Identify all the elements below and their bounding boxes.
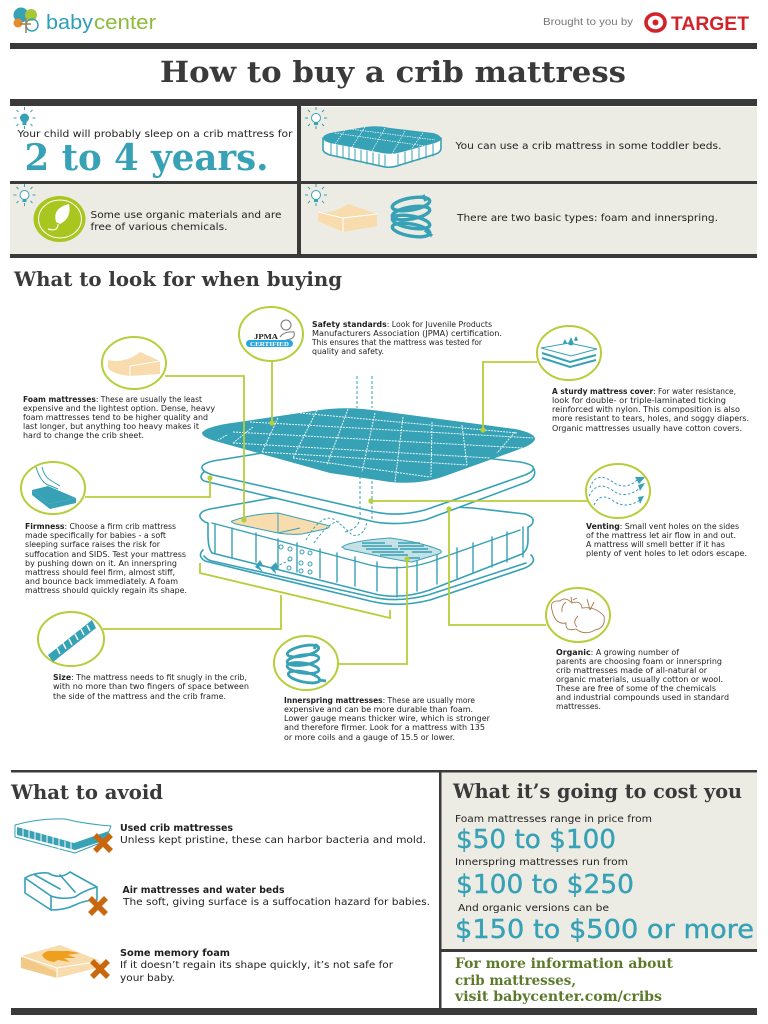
text: free of various chemicals. — [90, 222, 228, 233]
more information link text: crib mattresses, — [455, 973, 576, 989]
text — [552, 387, 749, 433]
title: How to buy a crib mattress — [160, 55, 626, 89]
text: Used crib mattresses — [120, 823, 233, 834]
text: of the mattress let air flow in and out. — [586, 531, 736, 540]
text: If it doesn’t regain its shape quickly, it’s not safe for — [120, 960, 394, 971]
quilted sheet — [202, 408, 535, 483]
text — [555, 648, 729, 711]
text: A sturdy mattress cover: For water resistance, — [552, 387, 736, 396]
icon: wavy mattress — [25, 872, 97, 910]
icon: spring — [391, 195, 432, 239]
text: suffocation and SIDS. Test your mattress — [25, 550, 186, 559]
text — [25, 522, 187, 595]
callout: organic — [446, 506, 729, 711]
text: or more coils and a gauge of 15.5 or lower. — [284, 733, 455, 742]
text: by pushing down on it. An innerspring — [25, 559, 177, 568]
more information link text: For more information about — [455, 956, 674, 972]
text: A mattress will smell better if it has — [586, 540, 725, 549]
text: mattress should quickly regain its shape. — [25, 586, 187, 595]
sponsor: brought to you by Target: TARGET — [671, 13, 749, 35]
text — [120, 823, 426, 846]
lower box — [200, 490, 533, 604]
heading: What to avoid — [10, 781, 163, 804]
text: The soft, giving surface is a suffocation hazard for babies. — [122, 897, 430, 908]
text — [122, 885, 430, 908]
icon: mattress — [323, 126, 441, 167]
price: innerspring: $100 to $250 — [456, 870, 634, 900]
text: Innerspring mattresses: These are usually more — [284, 696, 475, 705]
icon: layers and drops — [541, 336, 597, 367]
sponsor: brought to you by Target: Brought to you by — [543, 16, 634, 28]
text: Organic mattresses usually have cotton covers. — [552, 424, 742, 433]
icon: orange x — [92, 961, 108, 977]
callout: firmness — [21, 462, 213, 595]
logo: babycenter: baby — [46, 12, 93, 34]
panel: two basic types — [301, 184, 757, 254]
vent dashed lines — [345, 376, 372, 532]
text: Safety standards: Look for Juvenile Products — [312, 320, 492, 329]
text: You can use a crib mattress in some toddler beds. — [454, 141, 722, 152]
text: organic materials, usually cotton or wool. — [556, 675, 723, 684]
more information link text: visit babycenter.com/cribs — [454, 989, 662, 1005]
price: organic: $150 to $500 or more — [455, 915, 754, 945]
text — [120, 948, 394, 984]
price: organic — [455, 903, 754, 945]
text: and industrial compounds used in standard — [556, 693, 729, 702]
text: Foam mattresses: These are usually the least — [23, 395, 202, 404]
price: innerspring — [455, 857, 634, 900]
item: memory foam — [21, 945, 394, 984]
icon: bulb — [305, 107, 327, 129]
icon: bulb — [305, 184, 327, 206]
panel: what to avoid — [10, 781, 430, 984]
item: used crib mattresses — [15, 819, 426, 853]
icon: hand on mattress — [32, 467, 76, 509]
panel: toddler beds — [301, 107, 757, 181]
callout: venting — [368, 464, 747, 558]
text — [23, 395, 215, 440]
foam window — [232, 513, 329, 534]
text — [311, 320, 502, 356]
text — [586, 522, 747, 558]
vents — [275, 490, 368, 574]
icon: foam block — [318, 204, 377, 232]
text: Lower gauge means thicker wire, which is stronger — [284, 714, 491, 723]
spring window — [342, 538, 441, 562]
heading: What it’s going to cost you — [452, 780, 742, 803]
icon: bulb solid — [14, 107, 36, 129]
text: with no more than two fingers of space between — [53, 682, 249, 691]
heading: what to look for: What to look for when buying — [13, 268, 342, 291]
text: Some memory foam — [120, 948, 230, 959]
callout: size — [38, 563, 390, 701]
logo: babycenter: center — [94, 12, 156, 34]
icon: spring — [286, 643, 326, 685]
text: quality and safety. — [312, 347, 384, 356]
text: foam mattresses tend to be higher quality and — [23, 413, 208, 422]
item: air mattresses — [25, 872, 430, 914]
text: expensive and the lightest option. Dense, heavy — [23, 404, 215, 413]
icon: ruler — [48, 620, 96, 662]
text: mattress should feel firm, almost stiff, — [25, 568, 175, 577]
text: and bounce back immediately. A foam — [25, 577, 178, 586]
text: parents are choosing foam or innerspring — [556, 657, 722, 666]
price: foam — [455, 814, 652, 855]
price: organic: And organic versions can be — [458, 903, 609, 914]
text: more resistant to tears, holes, and soggy diapers. — [552, 414, 749, 423]
panel: what it's going to cost you — [441, 772, 757, 949]
panel: organic materials — [10, 184, 297, 254]
text: your baby. — [120, 973, 175, 984]
icon: airflow arrows — [589, 477, 645, 505]
text: look for double- or triple-laminated ticking — [552, 396, 726, 405]
text: plenty of vent holes to let odors escape. — [586, 549, 747, 558]
icon: foam with handprint — [21, 945, 101, 978]
text: hard to change the crib sheet. — [23, 431, 144, 440]
icon: leaf — [34, 196, 86, 242]
text: There are two basic types: foam and innerspring. — [456, 213, 718, 224]
text — [90, 210, 282, 233]
panel: 2 to 4 years: 2 to 4 years. — [24, 137, 268, 179]
text: Firmness: Choose a firm crib mattress — [25, 522, 176, 531]
text: Air mattresses and water beds — [122, 885, 285, 896]
icon: cotton — [551, 597, 604, 633]
icon: JPMA certified badge: CERTIFIED — [250, 342, 290, 348]
text: Some use organic materials and are — [90, 210, 282, 221]
callout: foam mattresses — [23, 337, 247, 523]
text: last longer, but anything too heavy makes it — [23, 422, 199, 431]
text: reinforced with nylon. This composition is also — [552, 405, 740, 414]
sponsor: brought to you by Target — [543, 13, 749, 35]
middle topper — [201, 453, 535, 524]
icon: JPMA certified badge — [246, 320, 294, 348]
chart: exploded mattress diagram — [200, 376, 535, 604]
callout: innerspring — [274, 556, 491, 742]
text: Manufacturers Association (JPMA) certification. — [312, 329, 502, 338]
text — [53, 673, 249, 701]
text: made specifically for babies - a soft — [25, 531, 166, 540]
callout: mattress cover — [480, 326, 749, 433]
text: crib mattresses made of all-natural or — [556, 666, 708, 675]
text: Venting: Small vent holes on the sides — [586, 522, 739, 531]
panel: 2 to 4 years — [14, 107, 293, 179]
text: mattresses. — [556, 702, 601, 711]
callout: safety standards — [239, 307, 502, 426]
icon: bulb — [14, 184, 36, 206]
text: and therefore firmer. Look for a mattress with 135 — [284, 723, 485, 732]
text: This ensures that the mattress was tested for — [311, 338, 483, 347]
icon: orange x — [95, 835, 111, 851]
text: the side of the mattress and the crib frame. — [53, 692, 226, 701]
text: Unless kept pristine, these can harbor bacteria and mold. — [120, 835, 426, 846]
icon: orange x — [90, 898, 106, 914]
icon: used mattress — [15, 819, 111, 853]
text: These are free of some of the chemicals — [555, 684, 716, 693]
more information link text — [454, 956, 674, 1005]
panel: 2 to 4 years: Your child will probably sleep on a crib mattress for — [16, 129, 293, 140]
price: innerspring: Innerspring mattresses run from — [455, 857, 628, 868]
logo: babycenter — [14, 8, 156, 34]
price: foam: Foam mattresses range in price from — [455, 814, 652, 825]
icon: JPMA certified badge: JPMA — [254, 333, 278, 341]
text: expensive and can be more durable than foam. — [284, 705, 473, 714]
icon: foam block — [108, 352, 160, 376]
text: sleeping surface raises the risk for — [25, 540, 161, 549]
text: Organic: A growing number of — [556, 648, 679, 657]
text: Size: The mattress needs to fit snugly in the crib, — [53, 673, 247, 682]
text — [284, 696, 491, 742]
price: foam: $50 to $100 — [456, 825, 616, 855]
